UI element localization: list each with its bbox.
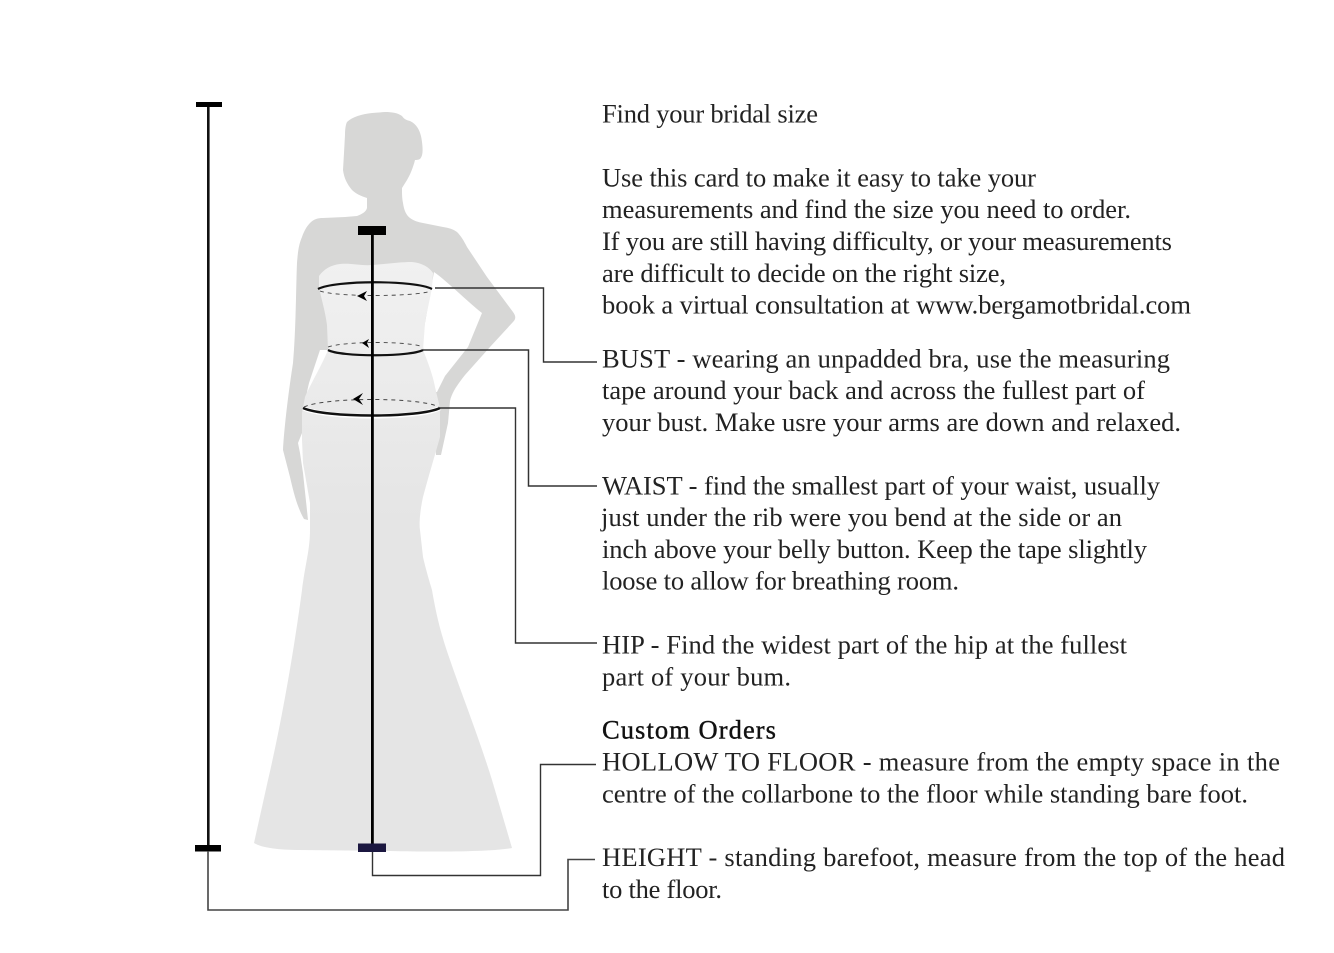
waist instructions: loose to allow for breathing room. [602, 566, 959, 596]
hollow bottom cap [358, 844, 386, 852]
height bottom cap [195, 845, 221, 852]
hollow to floor instructions: HOLLOW TO FLOOR - measure from the empty space in the [602, 746, 1280, 776]
waist instructions: WAIST - find the smallest part of your waist, usually [602, 470, 1161, 500]
bust leader line [435, 288, 597, 362]
waist instructions: inch above your belly button. Keep the tape slightly [602, 534, 1148, 564]
bust tape loop [318, 282, 432, 301]
waist leader line [423, 350, 597, 486]
hollow top cap [358, 226, 386, 235]
hollow to floor instructions [602, 746, 1280, 808]
hip instructions: HIP - Find the widest part of the hip at the fullest [602, 630, 1128, 660]
title: Find your bridal size [602, 98, 818, 128]
height instructions: HEIGHT - standing barefoot, measure from the top of the head [602, 842, 1285, 872]
intro paragraph [602, 162, 1191, 320]
hip instructions [602, 630, 1128, 692]
intro paragraph: book a virtual consultation at www.bergamotbridal.com [602, 290, 1191, 320]
hollow to floor instructions: centre of the collarbone to the floor while standing bare foot. [602, 778, 1248, 808]
hip tape loop [303, 393, 440, 416]
dress [254, 262, 512, 852]
bust instructions: tape around your back and across the fullest part of [602, 375, 1145, 405]
waist instructions [600, 470, 1161, 596]
silhouette head, neck, shoulders and arms [283, 112, 515, 520]
height instructions: to the floor. [602, 874, 722, 904]
figure silhouette: bride [254, 112, 515, 852]
hollow leader line [372, 764, 596, 876]
bust instructions: BUST - wearing an unpadded bra, use the measuring [602, 344, 1170, 374]
height instructions [602, 842, 1285, 904]
intro paragraph: Use this card to make it easy to take your [602, 162, 1036, 192]
height top cap [196, 102, 222, 107]
height leader line [208, 851, 595, 910]
hollow to floor measuring line with caps and leader [358, 226, 596, 876]
hip leader line [440, 408, 597, 643]
bust instructions [602, 344, 1181, 437]
height bar [207, 104, 210, 848]
hip instructions: part of your bum. [602, 662, 791, 692]
hollow bar [371, 230, 374, 846]
height measuring line with caps and leader [195, 102, 595, 910]
intro paragraph: are difficult to decide on the right size, [602, 258, 1006, 288]
waist instructions: just under the rib were you bend at the side or an [600, 502, 1122, 532]
white gap between waist and right arm [422, 272, 482, 392]
bust instructions: your bust. Make usre your arms are down and relaxed. [602, 407, 1181, 437]
intro paragraph: If you are still having difficulty, or your measurements [602, 226, 1172, 256]
custom orders heading: Custom Orders [602, 714, 776, 744]
intro paragraph: measurements and find the size you need to order. [602, 194, 1131, 224]
waist tape loop [328, 339, 423, 355]
